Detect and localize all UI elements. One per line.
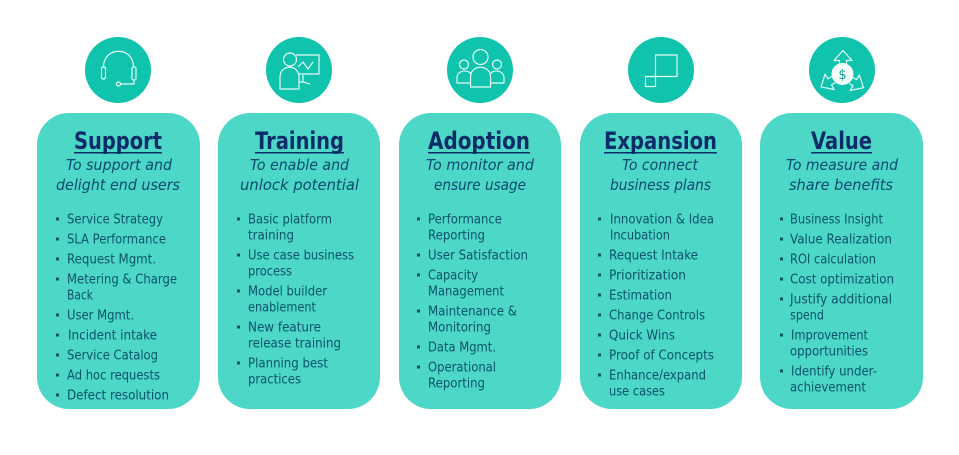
column: Training: [218, 37, 380, 409]
list: Value: Business Insight: [790, 212, 883, 228]
list: Value: spend: [790, 308, 824, 324]
icon: small and large squares: [628, 37, 694, 103]
list: Value: [780, 212, 894, 396]
icon: group of people: [447, 37, 513, 103]
list: Training: Model builder: [248, 284, 328, 300]
list: Expansion: Proof of Concepts: [609, 348, 714, 364]
icon: dollar coin with three arrows: $: [838, 68, 847, 83]
list: Training: Basic platform: [248, 212, 332, 228]
column: Adoption: [399, 37, 561, 409]
list: Expansion: Change Controls: [609, 308, 705, 324]
list: Support: Defect resolution: [67, 388, 169, 404]
list: Training: practices: [248, 372, 301, 388]
heading: Expansion: Expansion: [604, 127, 717, 155]
subtitle: Adoption: To monitor and: [426, 156, 534, 174]
heading: Adoption: Adoption: [428, 127, 530, 155]
list: Expansion: Enhance/expand: [609, 368, 706, 384]
list: Adoption: Operational: [428, 360, 496, 376]
list: Support: Service Strategy: [67, 212, 163, 228]
list: Expansion: Incubation: [610, 228, 670, 244]
list: Value: ROI calculation: [790, 252, 876, 268]
subtitle: Expansion: To connect: [622, 156, 699, 174]
list: Adoption: Monitoring: [428, 320, 491, 336]
list: Value: Cost optimization: [790, 272, 894, 288]
list: Expansion: Request Intake: [609, 248, 698, 264]
list: Adoption: Performance: [428, 212, 502, 228]
list: Support: [56, 212, 177, 404]
heading: Support: Support: [74, 127, 162, 155]
column: Value: [760, 37, 923, 409]
list: Support: Service Catalog: [67, 348, 158, 364]
list: Support: SLA Performance: [67, 232, 166, 248]
list: Expansion: Innovation & Idea: [610, 212, 714, 228]
list: Training: enablement: [248, 300, 316, 316]
list: Support: Back: [67, 288, 93, 304]
column: Support: [37, 37, 200, 409]
icon: dollar coin with three arrows: [809, 37, 875, 103]
subtitle: Value: [786, 156, 898, 194]
panel: Adoption: [399, 113, 561, 409]
list: Expansion: Quick Wins: [609, 328, 675, 344]
list: Value: Value Realization: [790, 232, 892, 248]
list: Adoption: Reporting: [428, 228, 485, 244]
subtitle: Support: To support and: [66, 156, 172, 174]
column: Expansion: [580, 37, 742, 409]
list: Expansion: Prioritization: [609, 268, 686, 284]
subtitle: Support: delight end users: [56, 176, 180, 194]
subtitle: Support: [56, 156, 180, 194]
subtitle: Expansion: business plans: [610, 176, 711, 194]
subtitle: Value: share benefits: [789, 176, 893, 194]
list: Training: training: [248, 228, 294, 244]
list: Training: Planning best: [248, 356, 328, 372]
list: Expansion: Estimation: [609, 288, 672, 304]
list: Training: process: [248, 264, 292, 280]
list: Support: Metering & Charge: [67, 272, 177, 288]
list: Expansion: [598, 212, 714, 400]
heading: Training: Training: [255, 127, 344, 155]
list: Training: New feature: [248, 320, 321, 336]
panel: Support: [37, 113, 200, 409]
panel: Value: [760, 113, 923, 409]
list: Adoption: [417, 212, 528, 392]
subtitle: Training: unlock potential: [240, 176, 360, 194]
list: Support: Request Mgmt.: [67, 252, 156, 268]
list: Adoption: Management: [428, 284, 504, 300]
subtitle: Value: To measure and: [786, 156, 898, 174]
heading: Value: Value: [811, 127, 872, 155]
list: Training: [237, 212, 354, 388]
icon: presenter at chart board: [266, 37, 332, 103]
list: Adoption: Maintenance &: [428, 304, 517, 320]
list: Value: achievement: [790, 380, 866, 396]
subtitle: Adoption: ensure usage: [434, 176, 526, 194]
list: Adoption: User Satisfaction: [428, 248, 528, 264]
icon: headset: [85, 37, 151, 103]
list: Training: Use case business: [248, 248, 354, 264]
list: Support: Ad hoc requests: [67, 368, 160, 384]
list: Support: User Mgmt.: [67, 308, 134, 324]
panel: Training: [218, 113, 380, 409]
list: Value: Improvement: [791, 328, 868, 344]
list: Adoption: Data Mgmt.: [428, 340, 496, 356]
list: Adoption: Reporting: [428, 376, 485, 392]
subtitle: Expansion: [610, 156, 711, 194]
subtitle: Training: [240, 156, 360, 194]
list: Value: Identify under-: [791, 364, 877, 380]
list: Training: release training: [248, 336, 341, 352]
list: Adoption: Capacity: [428, 268, 478, 284]
list: Expansion: use cases: [609, 384, 665, 400]
subtitle: Training: To enable and: [250, 156, 349, 174]
subtitle: Adoption: [426, 156, 534, 194]
list: Value: opportunities: [790, 344, 868, 360]
list: Value: Justify additional: [789, 292, 892, 308]
list: Support: Incident intake: [68, 328, 157, 344]
panel: Expansion: [580, 113, 742, 409]
